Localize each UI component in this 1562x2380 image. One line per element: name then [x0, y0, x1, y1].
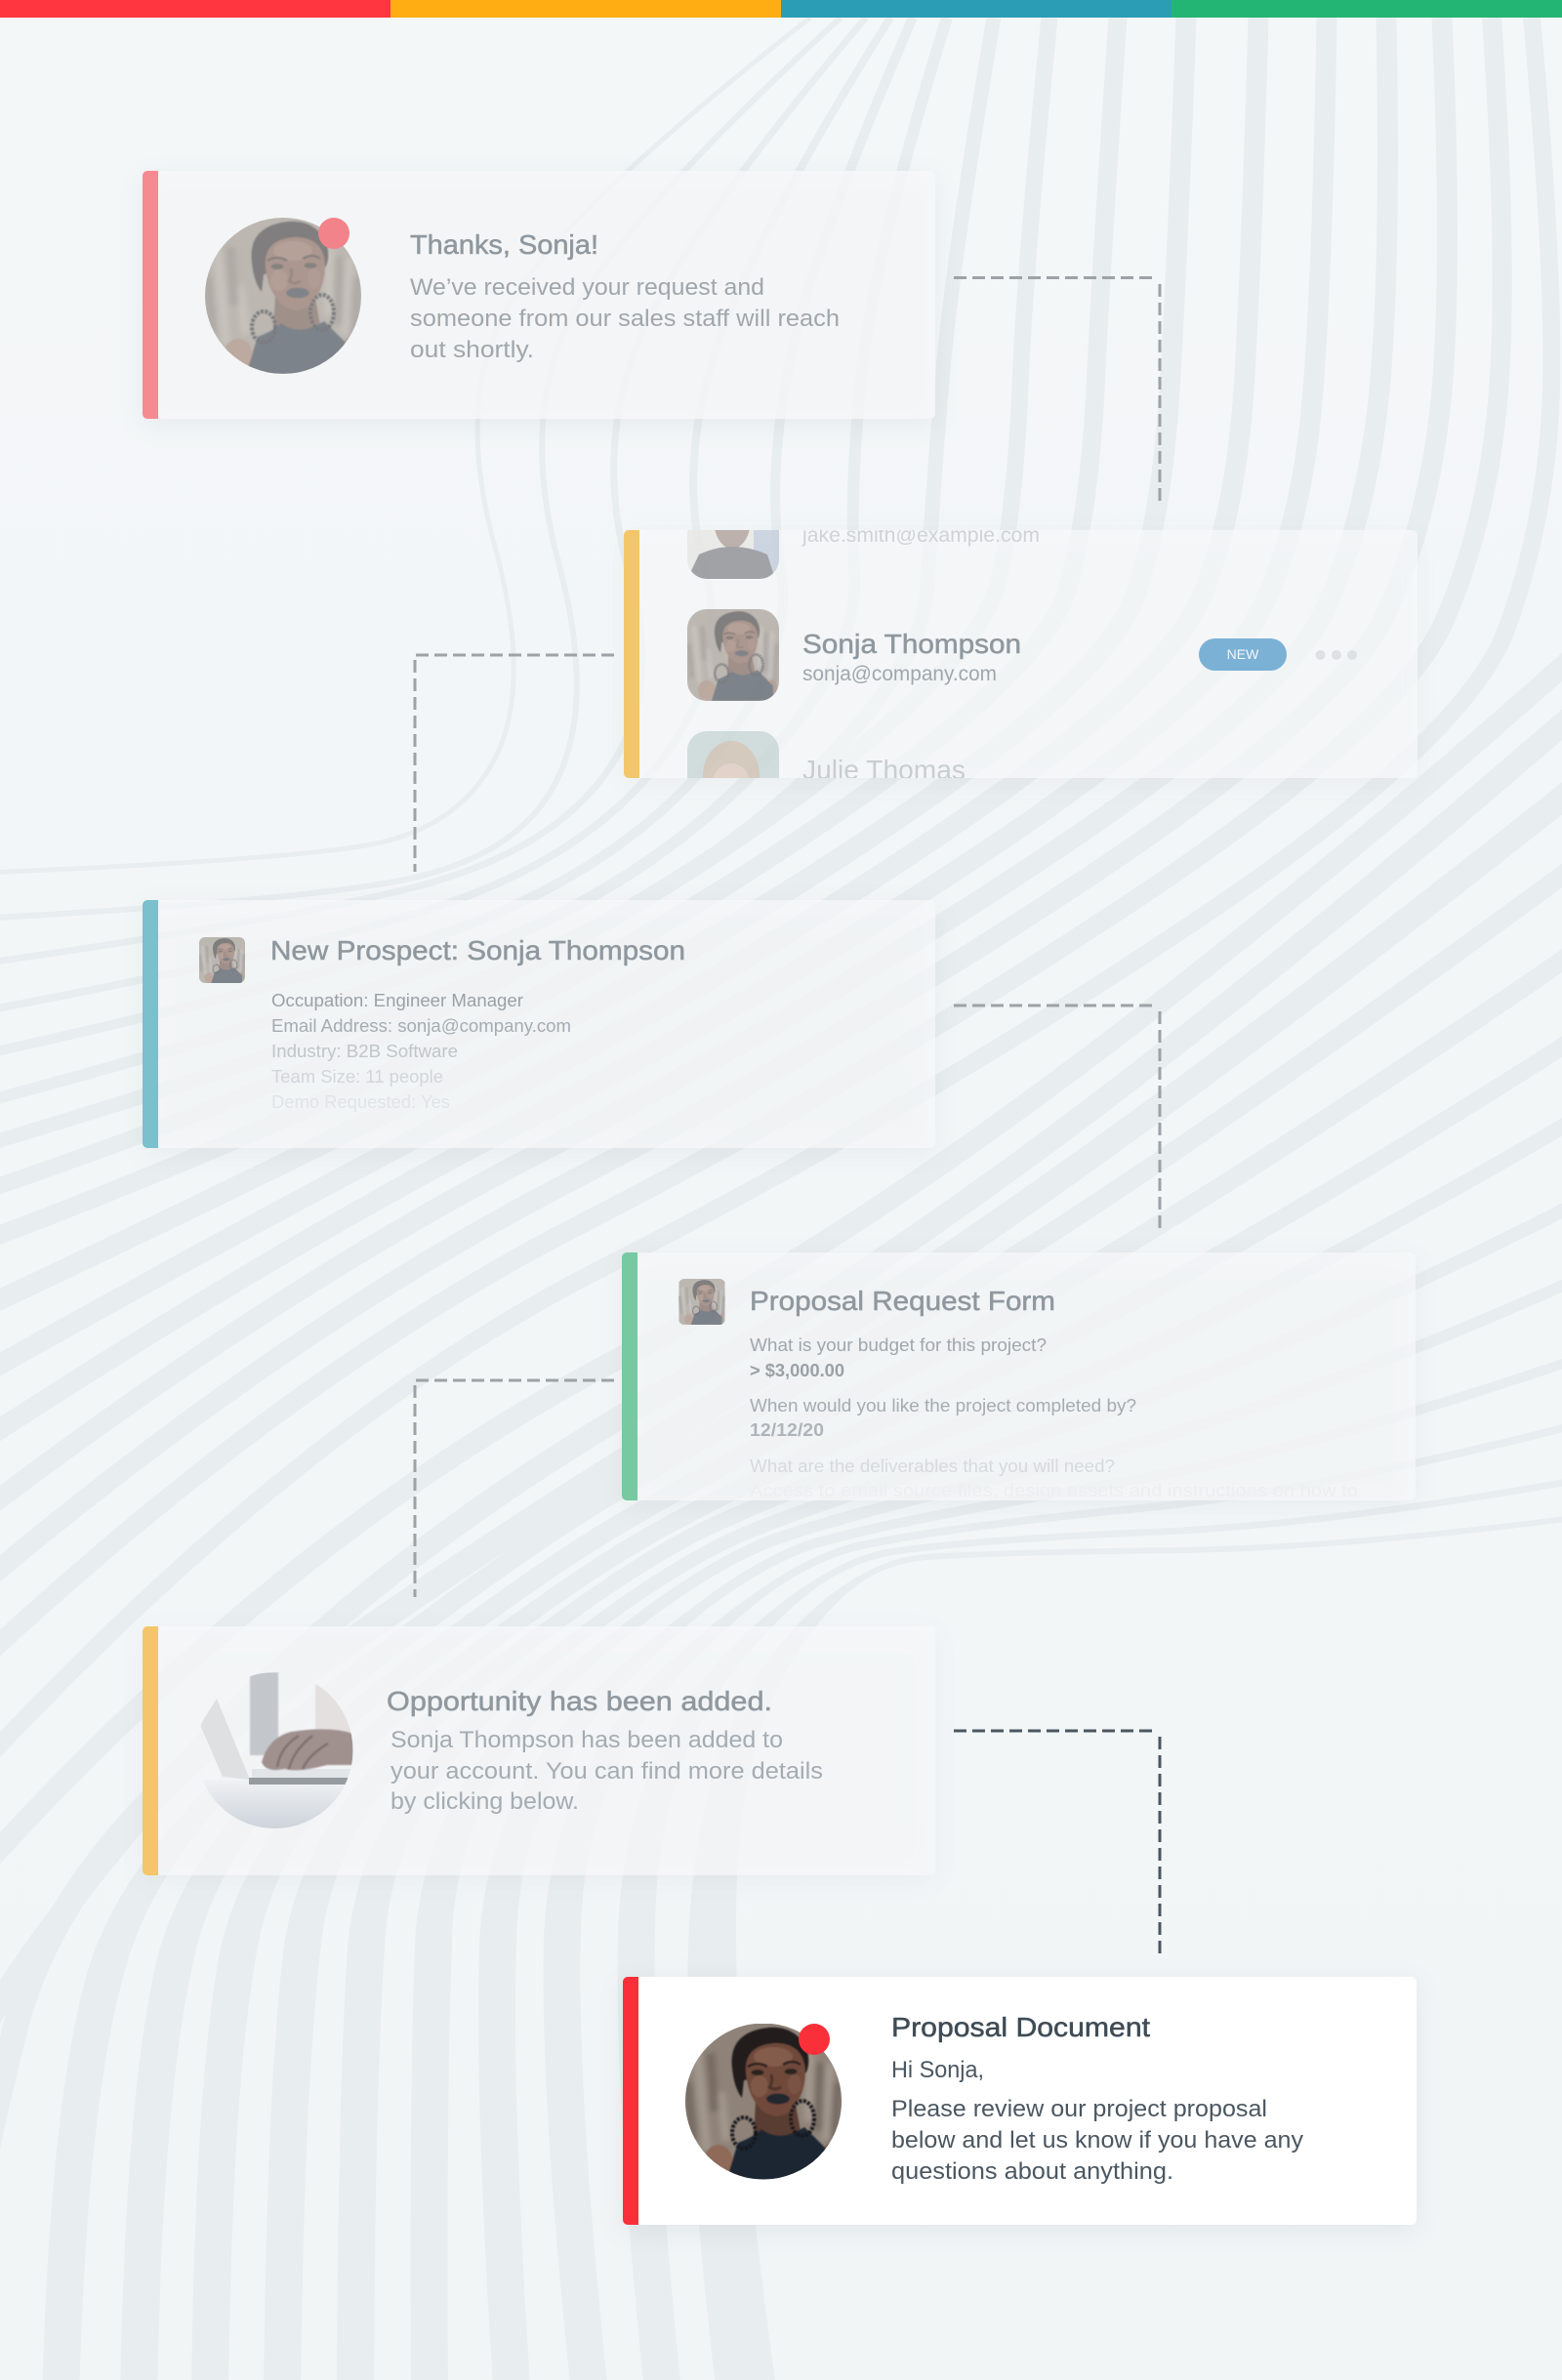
panel: new prospect card [143, 900, 935, 1154]
top colour bar [0, 0, 1562, 18]
background stripes: widened lower section [42, 1513, 930, 2380]
text: proposal message: Hi Sonja, [891, 2057, 984, 2083]
badge: NEW [1199, 638, 1287, 671]
heading: Proposal Document: Proposal Document [891, 2012, 1150, 2042]
text: prospect details fading out: Email Address: sonja@company.com [271, 1016, 571, 1036]
text: opportunity message [390, 1727, 823, 1815]
text: prospect details fading out [271, 991, 571, 1112]
heading: Thanks, Sonja!: Thanks, Sonja! [410, 229, 598, 260]
heading: Proposal Request Form: Proposal Request Form [750, 1286, 1055, 1316]
contact row: Julie Thomas [687, 731, 965, 778]
text: proposal message [891, 2057, 1303, 2185]
avatar: Sonja portrait with notification dot [685, 2024, 842, 2180]
panel: opportunity added card [143, 1626, 822, 1875]
text: prospect details fading out: Occupation: Engineer Manager [271, 991, 523, 1010]
text: opportunity message: by clicking below. [390, 1788, 579, 1815]
text: opportunity message: your account. You can find more details [390, 1758, 823, 1785]
text: prospect details fading out: Demo Requested: Yes [271, 1092, 450, 1112]
text: form questions and answers: When would you like the project completed by? [750, 1396, 1136, 1416]
text: proposal message: questions about anything. [891, 2158, 1173, 2185]
text: confirmation message: out shortly. [410, 337, 534, 363]
text: proposal message: below and let us know if you have any [891, 2127, 1303, 2154]
connector: card 1 to card 2 [954, 277, 1160, 504]
text: form questions and answers: > $3,000.00 [750, 1361, 844, 1380]
connector: card 3 to card 4 [954, 1005, 1160, 1230]
contact row: Julie Thomas: Julie Thomas [802, 755, 966, 785]
badge: NEW: NEW [1227, 646, 1259, 662]
text: form questions and answers: Access to email source files, design assets and instructions on how to [750, 1481, 1358, 1500]
contact row: Sonja Thompson: sonja@company.com [802, 663, 997, 685]
image: laptop and hands [196, 1672, 356, 1829]
text: confirmation message [410, 274, 840, 363]
connector: card 4 to card 5 [415, 1380, 614, 1597]
heading: New Prospect: New Prospect: Sonja Thompson [270, 935, 685, 965]
avatar: Sonja portrait with notification dot [205, 218, 361, 374]
panel: contact list card [624, 530, 1418, 778]
text: form questions and answers [750, 1335, 1358, 1500]
icon: more dots [1316, 650, 1357, 660]
panel: thanks confirmation card [143, 171, 935, 425]
text: form questions and answers: What are the deliverables that you will need? [750, 1457, 1115, 1476]
connector: card 2 to card 3 [415, 655, 614, 872]
text: opportunity message: Sonja Thompson has been added to [390, 1727, 783, 1753]
text: proposal message: Please review our project proposal [891, 2096, 1267, 2122]
text: form questions and answers: 12/12/20 [750, 1420, 824, 1440]
contact row: Sonja Thompson [687, 609, 1357, 701]
contact row: Jake Smith: jake.smith@example.com [802, 524, 1040, 547]
text: confirmation message: someone from our sales staff will reach [410, 306, 840, 332]
text: confirmation message: We’ve received your request and [410, 274, 764, 301]
panel: proposal document card [623, 1977, 1417, 2231]
connector: card 5 to card 6 [954, 1731, 1160, 1954]
text: prospect details fading out: Industry: B2B Software [271, 1042, 458, 1061]
avatar: Sonja thumbnail [199, 937, 245, 983]
text: form questions and answers: What is your budget for this project? [750, 1335, 1047, 1355]
list rows clipped to card [687, 530, 1357, 778]
text: prospect details fading out: Team Size: 11 people [271, 1067, 443, 1087]
panel: proposal request form card [622, 1252, 1416, 1506]
heading: Opportunity has been added: Opportunity has been added. [387, 1686, 772, 1716]
contact row: Sonja Thompson: Sonja Thompson [802, 629, 1021, 659]
contact row: Jake Smith [687, 530, 1039, 579]
avatar: Sonja thumbnail [679, 1279, 724, 1325]
